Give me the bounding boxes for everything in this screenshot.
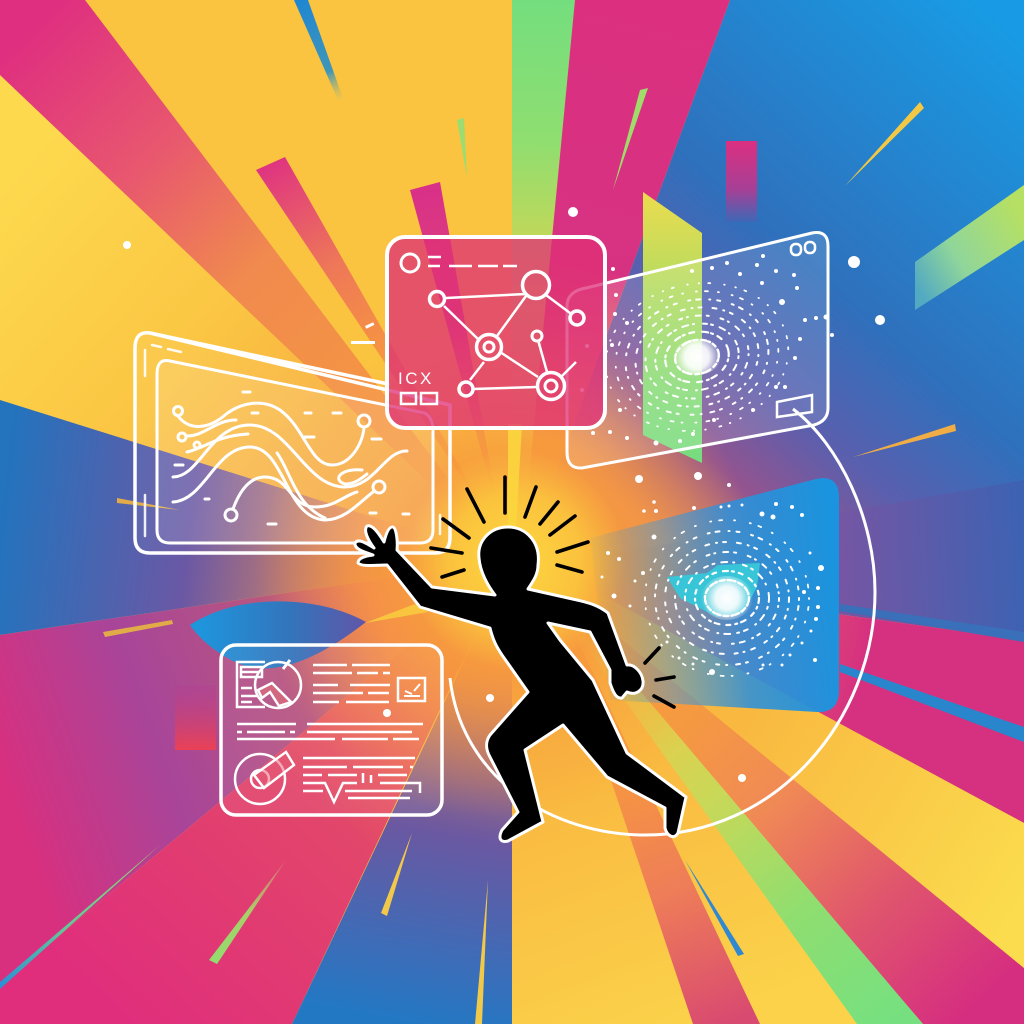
galaxy scattered stars xyxy=(580,254,834,446)
loose white dots xyxy=(123,207,885,782)
lime band top right xyxy=(915,185,1024,310)
panel window buttons xyxy=(777,242,815,417)
large orbit arc xyxy=(450,409,875,835)
burst lines around right hand xyxy=(645,648,674,707)
icon: picture thumbnail xyxy=(398,678,425,701)
icon: chart and hand xyxy=(237,660,301,708)
magenta block top right xyxy=(726,141,757,222)
burst lines around head xyxy=(431,477,588,577)
graph header xyxy=(401,254,517,272)
beam scattered stars xyxy=(600,472,824,675)
icon: disc and tag xyxy=(235,752,294,804)
graph label ICX: ICX xyxy=(398,369,434,388)
galaxy particles xyxy=(592,266,802,448)
red block left xyxy=(175,685,216,750)
beam particles xyxy=(645,520,809,676)
panel: galaxy top right xyxy=(567,192,834,468)
flow curve lines xyxy=(173,403,407,521)
text lines top xyxy=(313,665,390,702)
panel: flow curves xyxy=(135,333,450,553)
text lines bottom with pulse xyxy=(303,758,420,802)
black figure silhouette xyxy=(355,526,686,841)
text lines middle xyxy=(237,724,423,739)
panel: document with text lines xyxy=(221,645,442,815)
blue lens shape xyxy=(190,601,366,668)
panel: network graph xyxy=(387,237,605,428)
panel: galaxy beam xyxy=(590,472,839,712)
